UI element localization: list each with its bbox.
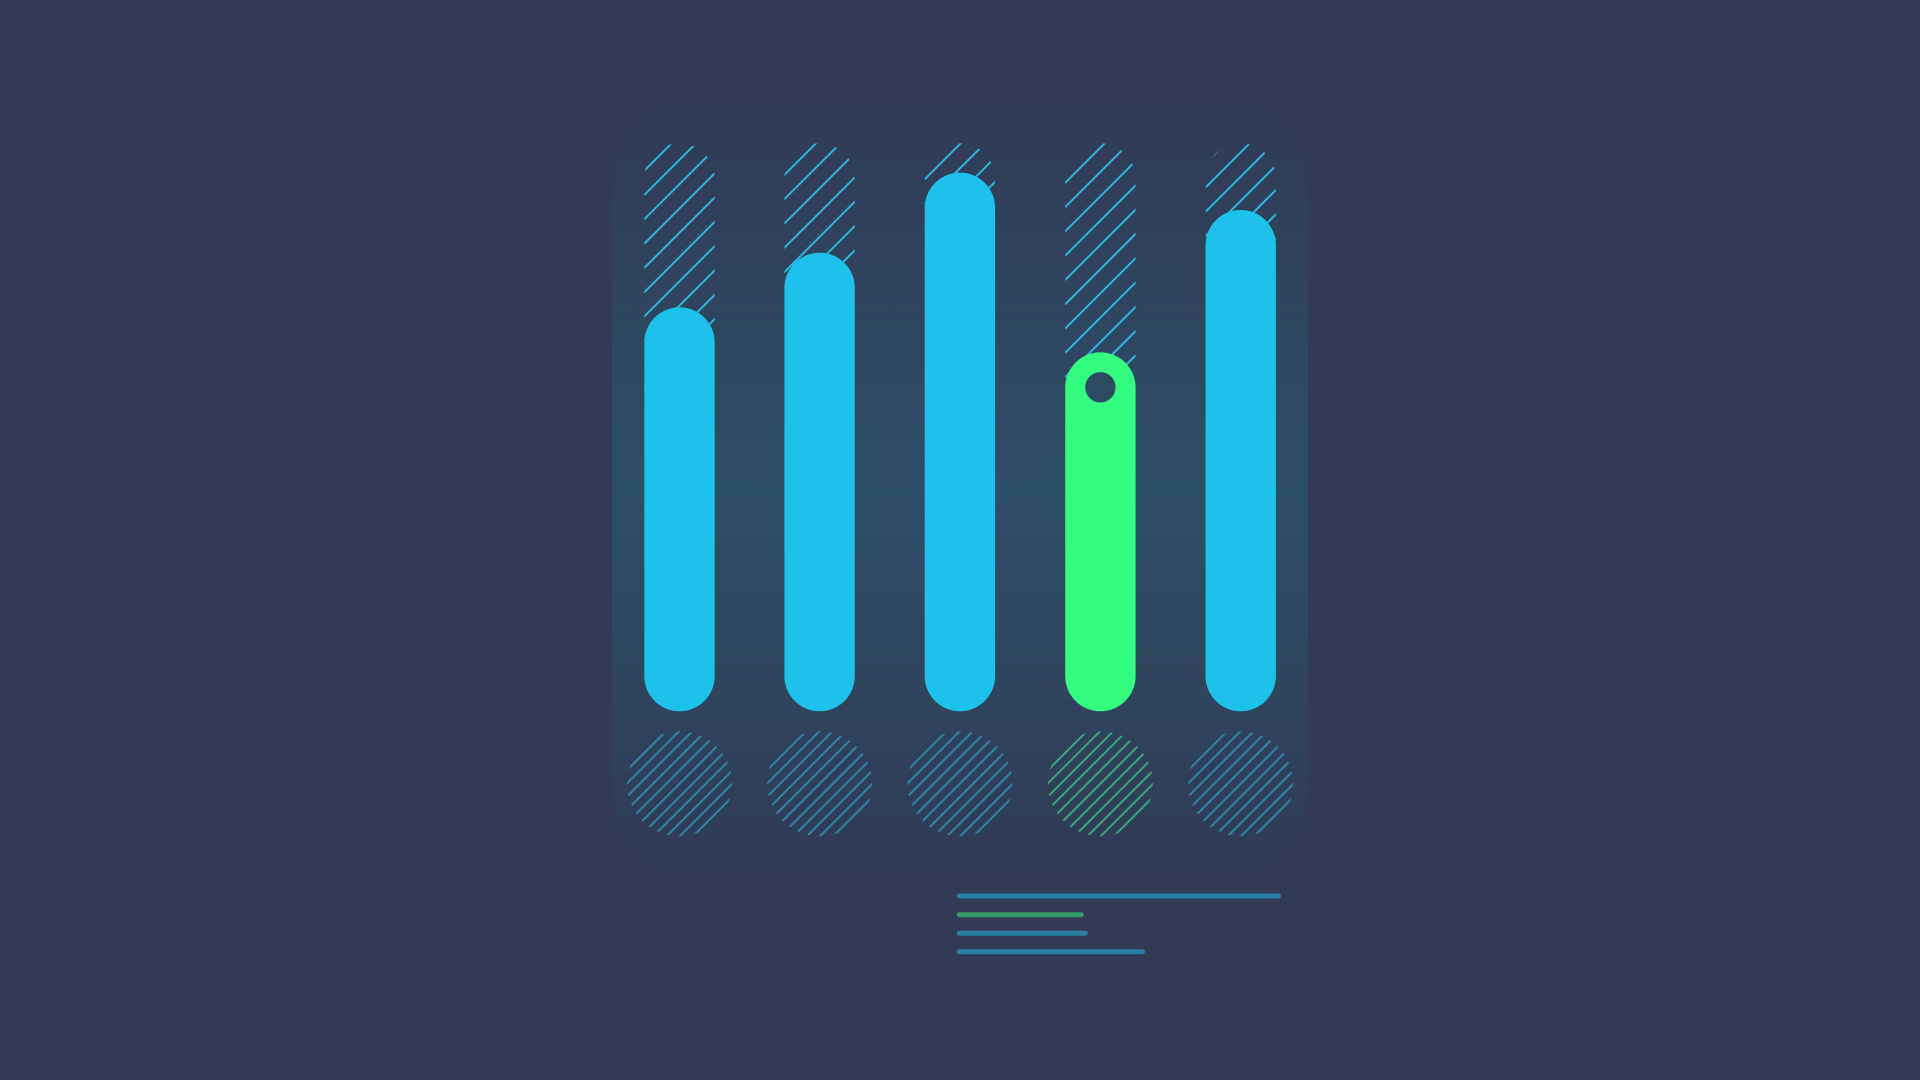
column 5 [1188,144,1294,836]
hatch 2 [784,143,855,322]
hatch 1 [644,144,715,390]
bar 2 [784,253,855,711]
column 2 [767,143,872,836]
circle hatch 1 [627,731,732,836]
bar 5 [1206,210,1276,711]
marker dot [1085,372,1116,402]
hatch 3 [924,143,996,277]
hatch 4 [1065,112,1136,426]
hatch 5 [1206,144,1276,240]
circle hatch 5 [1188,731,1294,836]
bar 4 [1065,352,1136,711]
bar 3 [925,173,995,711]
column 3 [908,143,1012,836]
circle hatch 2 [767,731,872,836]
column 1 [627,144,732,836]
circle hatch 3 [908,731,1012,836]
infographic canvas [612,143,1308,954]
bar 1 [644,307,715,711]
background panel [612,95,1308,885]
circle hatch 4 [1048,731,1153,836]
legend placeholder lines [957,894,1281,954]
column 4 highlighted [1048,143,1153,836]
